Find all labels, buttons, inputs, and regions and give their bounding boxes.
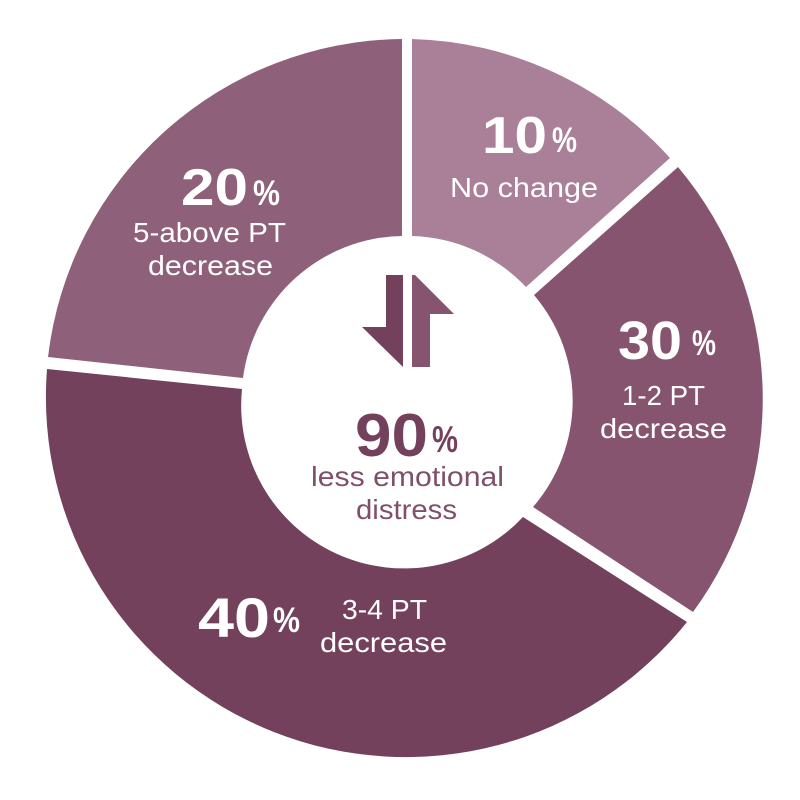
slice: 10% no change <box>412 39 670 287</box>
label: 30% 1-2 PT decrease: 1-2 PT <box>622 380 705 411</box>
label: 20% 5-above PT decrease: % <box>253 174 280 213</box>
label: 10% no change: % <box>552 121 577 160</box>
label: 40% 3-4 PT decrease: 40 <box>198 586 270 649</box>
label: 20% 5-above PT decrease: 5-above PT <box>133 217 286 248</box>
label: 30% 1-2 PT decrease <box>600 311 727 444</box>
label: 40% 3-4 PT decrease: decrease <box>320 627 447 658</box>
slice: 30% 1-2 PT decrease <box>533 167 763 612</box>
label: 10% no change: No change <box>450 172 598 203</box>
icon: down and up arrows <box>362 275 454 367</box>
center value: 90 <box>355 402 428 469</box>
label: 10% no change: 10 <box>482 107 547 165</box>
icon: up arrow <box>412 275 454 367</box>
label: 20% 5-above PT decrease: 20 <box>181 159 248 217</box>
label: 40% 3-4 PT decrease: 3-4 PT <box>342 594 427 625</box>
label: 30% 1-2 PT decrease: % <box>692 324 716 363</box>
label: 20% 5-above PT decrease: decrease <box>148 250 273 281</box>
label: 30% 1-2 PT decrease: 30 <box>618 311 682 371</box>
icon: down arrow <box>362 275 403 367</box>
center percent sign: % <box>432 419 458 460</box>
label: 40% 3-4 PT decrease <box>198 586 447 658</box>
center caption line 2: distress <box>356 494 457 525</box>
center stat: 90% less emotional distress <box>311 402 504 525</box>
label: 40% 3-4 PT decrease: % <box>273 601 300 640</box>
slice: 20% 5-above PT decrease <box>48 39 402 378</box>
center caption line 1: less emotional <box>311 461 504 492</box>
slice: 40% 3-4 PT decrease <box>46 369 687 757</box>
label: 10% no change <box>450 107 598 203</box>
label: 20% 5-above PT decrease <box>133 159 286 281</box>
label: 30% 1-2 PT decrease: decrease <box>600 413 727 444</box>
